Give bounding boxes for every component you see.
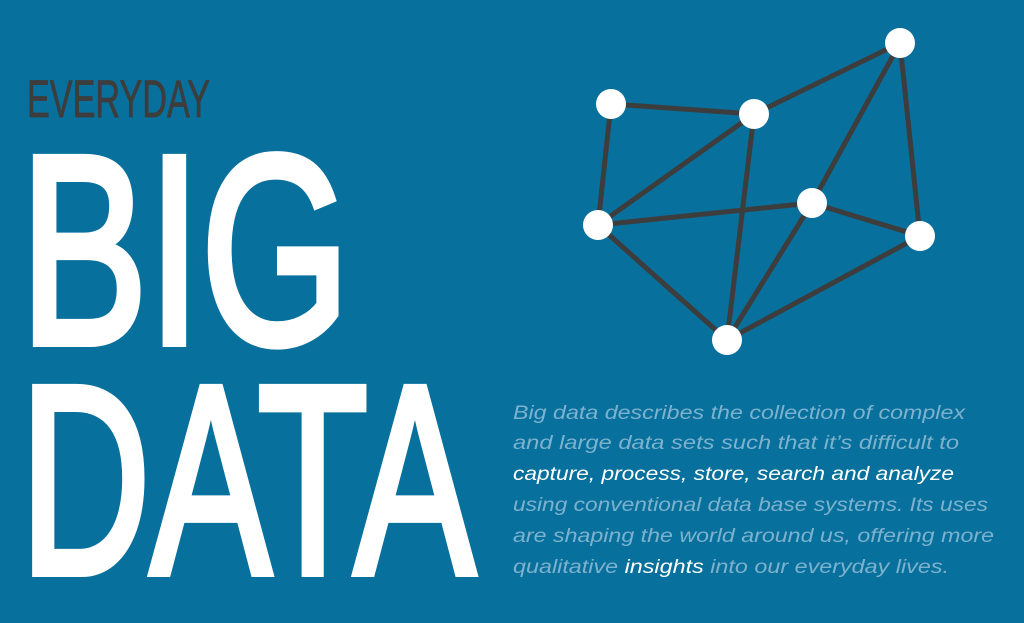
description paragraph: using conventional data base systems. Its uses [513,494,988,516]
title: data: DATA [20,330,476,623]
network graph icon [583,28,935,355]
description paragraph: are shaping the world around us, offering more [513,525,994,547]
description paragraph: Big data describes the collection of complex [513,402,966,424]
title: everyday: EVERYDAY [27,70,210,129]
description paragraph [513,402,994,578]
description paragraph: capture, process, store, search and analyze [513,463,954,485]
description paragraph: qualitative insights into our everyday lives. [513,556,949,578]
title: big: BIG [20,100,350,401]
description paragraph: and large data sets such that it’s difficult to [513,432,959,454]
